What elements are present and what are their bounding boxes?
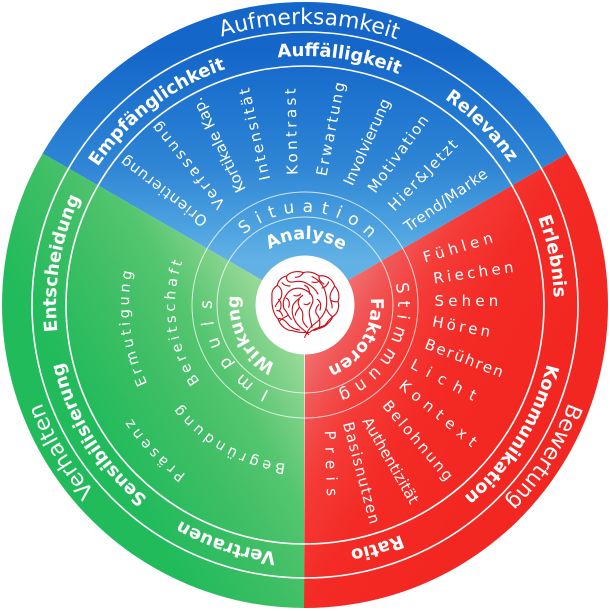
items: blue segment [116, 78, 491, 236]
label: Erlebnis: Erlebnis [538, 214, 567, 297]
items: red segment [321, 228, 518, 527]
items: blue segment: Trend/Marke [400, 164, 491, 236]
items: blue segment: Erwartung [313, 78, 349, 178]
items: red segment: Sehen [434, 292, 502, 310]
items: blue segment: Involvierung [340, 96, 394, 188]
segment: red evaluation [304, 154, 608, 608]
items: red segment: Kontext [396, 376, 485, 455]
items: blue segment: Verfassung [146, 116, 229, 213]
items: blue segment: Motivation [364, 111, 433, 196]
items: red segment: Riechen [432, 258, 518, 287]
heading: Aufmerksamkeit: Aufmerksamkeit [222, 8, 400, 40]
heading: Verhalten: Verhalten [32, 404, 91, 502]
items: green segment: Ermutigung [118, 271, 147, 387]
items: red segment: Licht [408, 355, 487, 409]
items: blue segment: Hier&Jetzt [384, 135, 463, 214]
center circle [256, 256, 354, 354]
inner ring: Situation: Situation [238, 202, 374, 238]
inner ring: Stimmung: Stimmung [339, 283, 410, 400]
label: Sensibilisierung: Sensibilisierung [54, 364, 146, 506]
label: Auffälligkeit: Auffälligkeit [278, 42, 402, 74]
segment: green behaviour [2, 154, 305, 608]
items: blue segment: Kontrast [281, 85, 302, 175]
label: Empfänglichkeit: Empfänglichkeit [88, 58, 226, 166]
core: Faktoren: Faktoren [328, 299, 384, 375]
label: Kommunikation: Kommunikation [465, 366, 560, 502]
heading: Bewertung: Bewertung [506, 404, 583, 509]
core: Wirkung: Wirkung [229, 296, 273, 376]
label: Entscheidung: Entscheidung [43, 194, 82, 331]
items: red segment: Basisnutzen [339, 420, 384, 527]
items: red segment: Fühlen [421, 228, 499, 266]
inner ring: Impuls: Impuls [200, 301, 268, 402]
label: Ratio: Ratio [352, 536, 404, 560]
items: green segment: Begründung [174, 405, 284, 474]
items: red segment: Hören [431, 312, 495, 342]
items: red segment: Berühren [422, 335, 508, 382]
label: Relevanz: Relevanz [446, 88, 517, 162]
items: red segment: Belohnung [379, 397, 458, 486]
items: blue segment: Intensität [235, 84, 274, 182]
label: Vertrauen: Vertrauen [178, 521, 274, 566]
segment: blue attention [43, 2, 567, 305]
items: blue segment: Kortikale Kap. [188, 95, 250, 195]
items: green segment [118, 260, 284, 482]
items: red segment: Preis [321, 430, 341, 504]
items: green segment: Bereitschaft [164, 260, 199, 386]
icon: brain [272, 272, 339, 337]
items: green segment: Präsenz [126, 419, 185, 482]
items: red segment: Authentizität [358, 414, 423, 507]
core: Analyse: Analyse [268, 226, 346, 250]
items: blue segment: Orientierung [116, 152, 211, 230]
